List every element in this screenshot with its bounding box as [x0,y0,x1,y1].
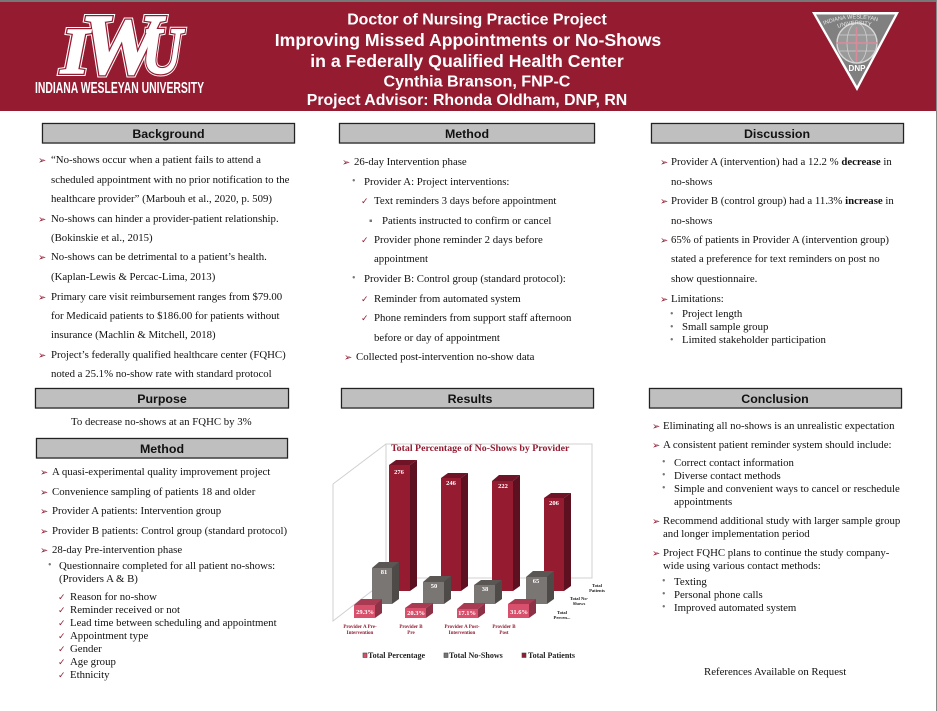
bullet: no-show rate: Project’s federally qualified healthcare center (FQHC) [51,349,286,361]
provider B: ✓ [361,295,369,305]
panel: purpose [36,388,288,428]
conclusion: future plans: Project FQHC plans to continue the study company- [663,547,890,559]
series: total no-shows: 50 [431,583,437,590]
chart legend: Total No-Shows [449,651,503,660]
heading: discussion: Discussion [744,127,810,141]
depth axis labels: Shows [573,601,585,606]
bullet: no-show definition: “No-shows occur when a patient fails to attend a [51,154,261,166]
limitations: • [670,335,674,346]
finding: provider B [660,195,894,227]
conclusion: future plans: Improved automated system [674,602,797,614]
conclusion: additional study: and longer implementation period [663,528,810,540]
panel: conclusion [650,388,902,678]
finding: provider A: ➢ [660,157,668,168]
bullet: health: ➢ [38,252,46,263]
intervention phase: ➢ [342,157,350,168]
provider A: ✓ [361,236,369,246]
provider A: ▪ [369,216,373,227]
heading: conclusion: Conclusion [741,392,809,406]
logo: IWU Indiana Wesleyan University: I [60,15,92,88]
bullet: relationship: ➢ [38,214,46,225]
logo: IWU Indiana Wesleyan University [35,0,204,97]
bullet: relationship: No-shows can hinder a provider-patient relationship. [51,213,279,225]
depth axis labels [554,583,605,620]
conclusion: future plans: • [662,589,666,600]
conclusion: unrealistic: ➢ [652,421,660,432]
chart legend: Total Percentage [368,651,426,660]
heading: background [42,124,294,143]
method bullets: 28-day Pre-intervention phase [52,544,182,556]
series: total no-shows: 65 [533,578,540,585]
category labels: Provider A Pre- [343,625,377,630]
series: total patients [389,460,571,591]
bullet: no-show definition: ➢ [38,155,46,166]
provider A: Provider A: Project interventions: [364,176,509,188]
finding: provider A [660,156,892,188]
chart legend: Total Patients [528,651,575,660]
chart title: Total Percentage of No-Shows by Provider [391,443,570,454]
title block: Improving Missed Appointments or No-Shows [275,30,661,50]
panel: results [333,388,605,660]
conclusion: reminder system: • [662,470,666,481]
method bullets: A quasi-experimental quality improvement project [52,466,270,478]
bullet: reimbursement: insurance (Machlin & Mitchell, 2018) [51,329,216,341]
bullet: no-show definition: scheduled appointment with no prior notification to the [51,174,290,186]
depth axis labels: Total [557,610,568,615]
logo: IWU Indiana Wesleyan University: I [60,15,92,88]
questionnaire checklist: Age group [70,656,116,668]
provider B: • [352,273,356,284]
heading: method [36,438,288,458]
finding: provider B: ➢ [660,196,668,207]
limitations: Limited stakeholder participation [682,334,827,346]
finding: provider A: no-shows [671,176,712,188]
conclusion: additional study [652,515,900,540]
provider B: Phone reminders from support staff afternoon [374,312,572,324]
conclusion: future plans: Texting [674,576,707,588]
bullet: reimbursement: Primary care visit reimbursement ranges from $79.00 [51,291,282,303]
provider B [352,273,572,344]
provider A [352,176,556,265]
depth axis labels: Percen... [554,615,570,620]
conclusion: unrealistic: Eliminating all no-shows is an unrealistic expectation [663,420,895,432]
category labels: Pre [407,631,415,636]
bullet: health: (Kaplan-Lewis & Percac-Lima, 2013) [51,271,216,283]
provider A: • [352,176,356,187]
finding: preference: show questionnaire. [671,273,757,285]
limitations: • [670,322,674,333]
conclusion: future plans: • [662,602,666,613]
heading: discussion [652,124,904,143]
questionnaire checklist: ✓ [58,593,66,603]
category labels [343,625,516,636]
series: total no-shows: 38 [482,586,489,593]
panel: method middle [340,124,594,363]
header banner [0,0,936,111]
icon: DNP triangular seal: UNIVERSITY [837,20,872,28]
method bullets: ➢ [40,487,48,498]
provider B: before or day of appointment [374,332,500,344]
questionnaire checklist: ✓ [58,645,66,655]
title block: Cynthia Branson, FNP-C [384,72,571,90]
series: total patients: 222 [498,483,508,490]
conclusion: reminder system: • [662,457,666,468]
post-intervention data: Collected post-intervention no-show data [356,351,535,363]
finding: preference: stated a preference for text reminders on post no [671,253,880,265]
questionnaire sub-bullet: Questionnaire completed for all patient no-shows: [59,560,275,572]
series: total patients: 246 [446,480,457,487]
panel: background [38,124,294,380]
finding: provider B: no-shows [671,215,712,227]
finding: preference [660,234,889,285]
questionnaire sub-bullet: (Providers A & B) [59,573,138,585]
conclusion: reminder system: appointments [674,496,732,508]
conclusion: reminder system: Diverse contact methods [674,470,781,482]
conclusion: future plans: ➢ [652,548,660,559]
method bullets: ➢ [40,467,48,478]
conclusion: reminder system: ➢ [652,440,660,451]
questionnaire sub-bullet [48,560,275,585]
finding: provider A: Provider A (intervention) had a 12.2 % decrease in [671,156,892,168]
bullet: reimbursement [38,291,282,341]
conclusion: reminder system: Correct contact information [674,457,795,469]
provider A: Patients instructed to confirm or cancel [382,215,551,227]
questionnaire checklist: Ethnicity [70,669,110,681]
questionnaire checklist: ✓ [58,619,66,629]
method bullets: ➢ [40,545,48,556]
conclusion: future plans: • [662,576,666,587]
provider A: Text reminders 3 days before appointment [374,195,556,207]
category labels: Intervention [449,631,476,636]
series: total percentage: 20.3% [407,610,425,617]
post-intervention data: ➢ [344,352,352,363]
provider A: Provider phone reminder 2 days before [374,234,543,246]
heading: purpose [36,388,288,408]
depth axis labels: Patients [589,588,605,593]
questionnaire checklist: ✓ [58,632,66,642]
bullet: health [38,251,267,283]
logo: IWU Indiana Wesleyan University: I [60,15,92,88]
conclusion: future plans: wide using various contact methods: [663,560,821,572]
series: total patients: 276 [394,469,405,476]
limitations: • [670,309,674,320]
purpose statement: To decrease no-shows at an FQHC by 3% [71,416,252,428]
series: total no-shows [372,562,554,604]
conclusion: reminder system: • [662,483,666,494]
questionnaire checklist: Reminder received or not [70,604,180,616]
limitations: Small sample group [682,321,768,333]
conclusion: future plans [652,547,890,614]
bullet: reimbursement: ➢ [38,292,46,303]
provider B: Provider B: Control group (standard protocol): [364,273,566,285]
series: total percentage: 29.3% [356,609,374,616]
heading: method: Method [140,442,184,456]
conclusion: reminder system [652,439,900,508]
heading: conclusion [650,388,902,408]
series: total percentage: 17.1% [458,610,476,617]
category labels: Provider A Post- [444,625,480,630]
provider A: ✓ [361,197,369,207]
limitations: ➢ [660,294,668,305]
panel: discussion [652,124,904,346]
questionnaire checklist: Gender [70,643,102,655]
finding: preference: ➢ [660,235,668,246]
heading: results [342,388,594,408]
category labels: Provider B [492,625,516,630]
series: total no-shows: 81 [381,569,387,576]
questionnaire checklist: ✓ [58,658,66,668]
provider B: ✓ [361,314,369,324]
category labels: Provider B [399,625,423,630]
heading: purpose: Purpose [137,392,187,406]
provider B: Reminder from automated system [374,293,521,305]
method bullets: ➢ [40,526,48,537]
conclusion: additional study: ➢ [652,516,660,527]
series: total percentage [354,599,536,618]
limitations: Project length [682,308,743,320]
logo: IWU Indiana Wesleyan University: U [142,15,185,88]
bullet: no-show rate [38,349,286,380]
series: total percentage: 31.6% [510,609,528,616]
depth axis labels: Total No- [570,596,589,601]
conclusion: reminder system: Simple and convenient ways to cancel or reschedule [674,483,900,495]
questionnaire checklist: Lead time between scheduling and appointment [70,617,277,629]
method bullets: ➢ [40,506,48,517]
questionnaire checklist: ✓ [58,606,66,616]
questionnaire checklist: ✓ [58,671,66,681]
chart: total percentage of no-shows by provider [333,443,605,660]
bullet: no-show definition [38,154,290,205]
logo: IWU Indiana Wesleyan University: U [142,15,185,88]
heading: method [340,124,594,143]
logo: IWU Indiana Wesleyan University: INDIANA WESLEYAN UNIVERSITY [35,80,204,97]
bullet: relationship [38,213,279,244]
panel: method left [36,438,288,681]
provider A: appointment [374,253,428,265]
icon: DNP triangular seal: DNP [849,64,866,73]
conclusion: reminder system: A consistent patient reminder system should include: [663,439,892,451]
heading: method: Method [445,127,489,141]
references note: References Available on Request [704,666,846,678]
bullet: relationship: (Bokinskie et al., 2015) [51,232,153,244]
finding: provider B: Provider B (control group) had a 11.3% increase in [671,195,894,207]
title block: Doctor of Nursing Practice Project [347,12,608,28]
finding: preference: 65% of patients in Provider A (intervention group) [671,234,889,246]
limitations: Limitations: [671,293,724,305]
bullet: reimbursement: for Medicaid patients to $186.00 for patients without [51,310,280,322]
method bullets [40,466,287,556]
series: total patients: 206 [549,500,560,507]
questionnaire sub-bullet: • [48,560,52,571]
questionnaire checklist [58,591,277,681]
questionnaire checklist: Appointment type [70,630,148,642]
bullet: no-show rate: ➢ [38,350,46,361]
chart walls [333,444,592,621]
bullet: no-show definition: healthcare provider” (Marbouh et al., 2020, p. 509) [51,193,272,205]
category labels: Intervention [347,631,374,636]
heading: results: Results [448,392,492,406]
bullet: health: No-shows can be detrimental to a patient’s health. [51,251,267,263]
icon: DNP triangular seal [812,12,899,91]
chart legend [363,651,575,660]
title block: in a Federally Qualified Health Center [310,51,624,71]
intervention phase: 26-day Intervention phase [354,156,467,168]
logo: IWU Indiana Wesleyan University: U [142,15,185,88]
title block [275,12,661,109]
limitations [660,293,827,346]
icon: DNP triangular seal: INDIANA WESLEYAN [823,14,878,25]
method bullets: Provider B patients: Control group (standard protocol) [52,525,287,537]
conclusion: future plans: Personal phone calls [674,589,763,601]
method bullets: Provider A patients: Intervention group [52,505,221,517]
conclusion: additional study: Recommend additional study with larger sample group [663,515,900,527]
depth axis labels: Total [592,583,603,588]
bullet: no-show rate: noted a 25.1% no-show rate with standard protocol [51,368,272,380]
title block: Project Advisor: Rhonda Oldham, DNP, RN [307,92,627,109]
method bullets: Convenience sampling of patients 18 and older [52,486,256,498]
heading: background: Background [132,127,205,141]
category labels: Post [499,631,509,636]
questionnaire checklist: Reason for no-show [70,591,157,603]
